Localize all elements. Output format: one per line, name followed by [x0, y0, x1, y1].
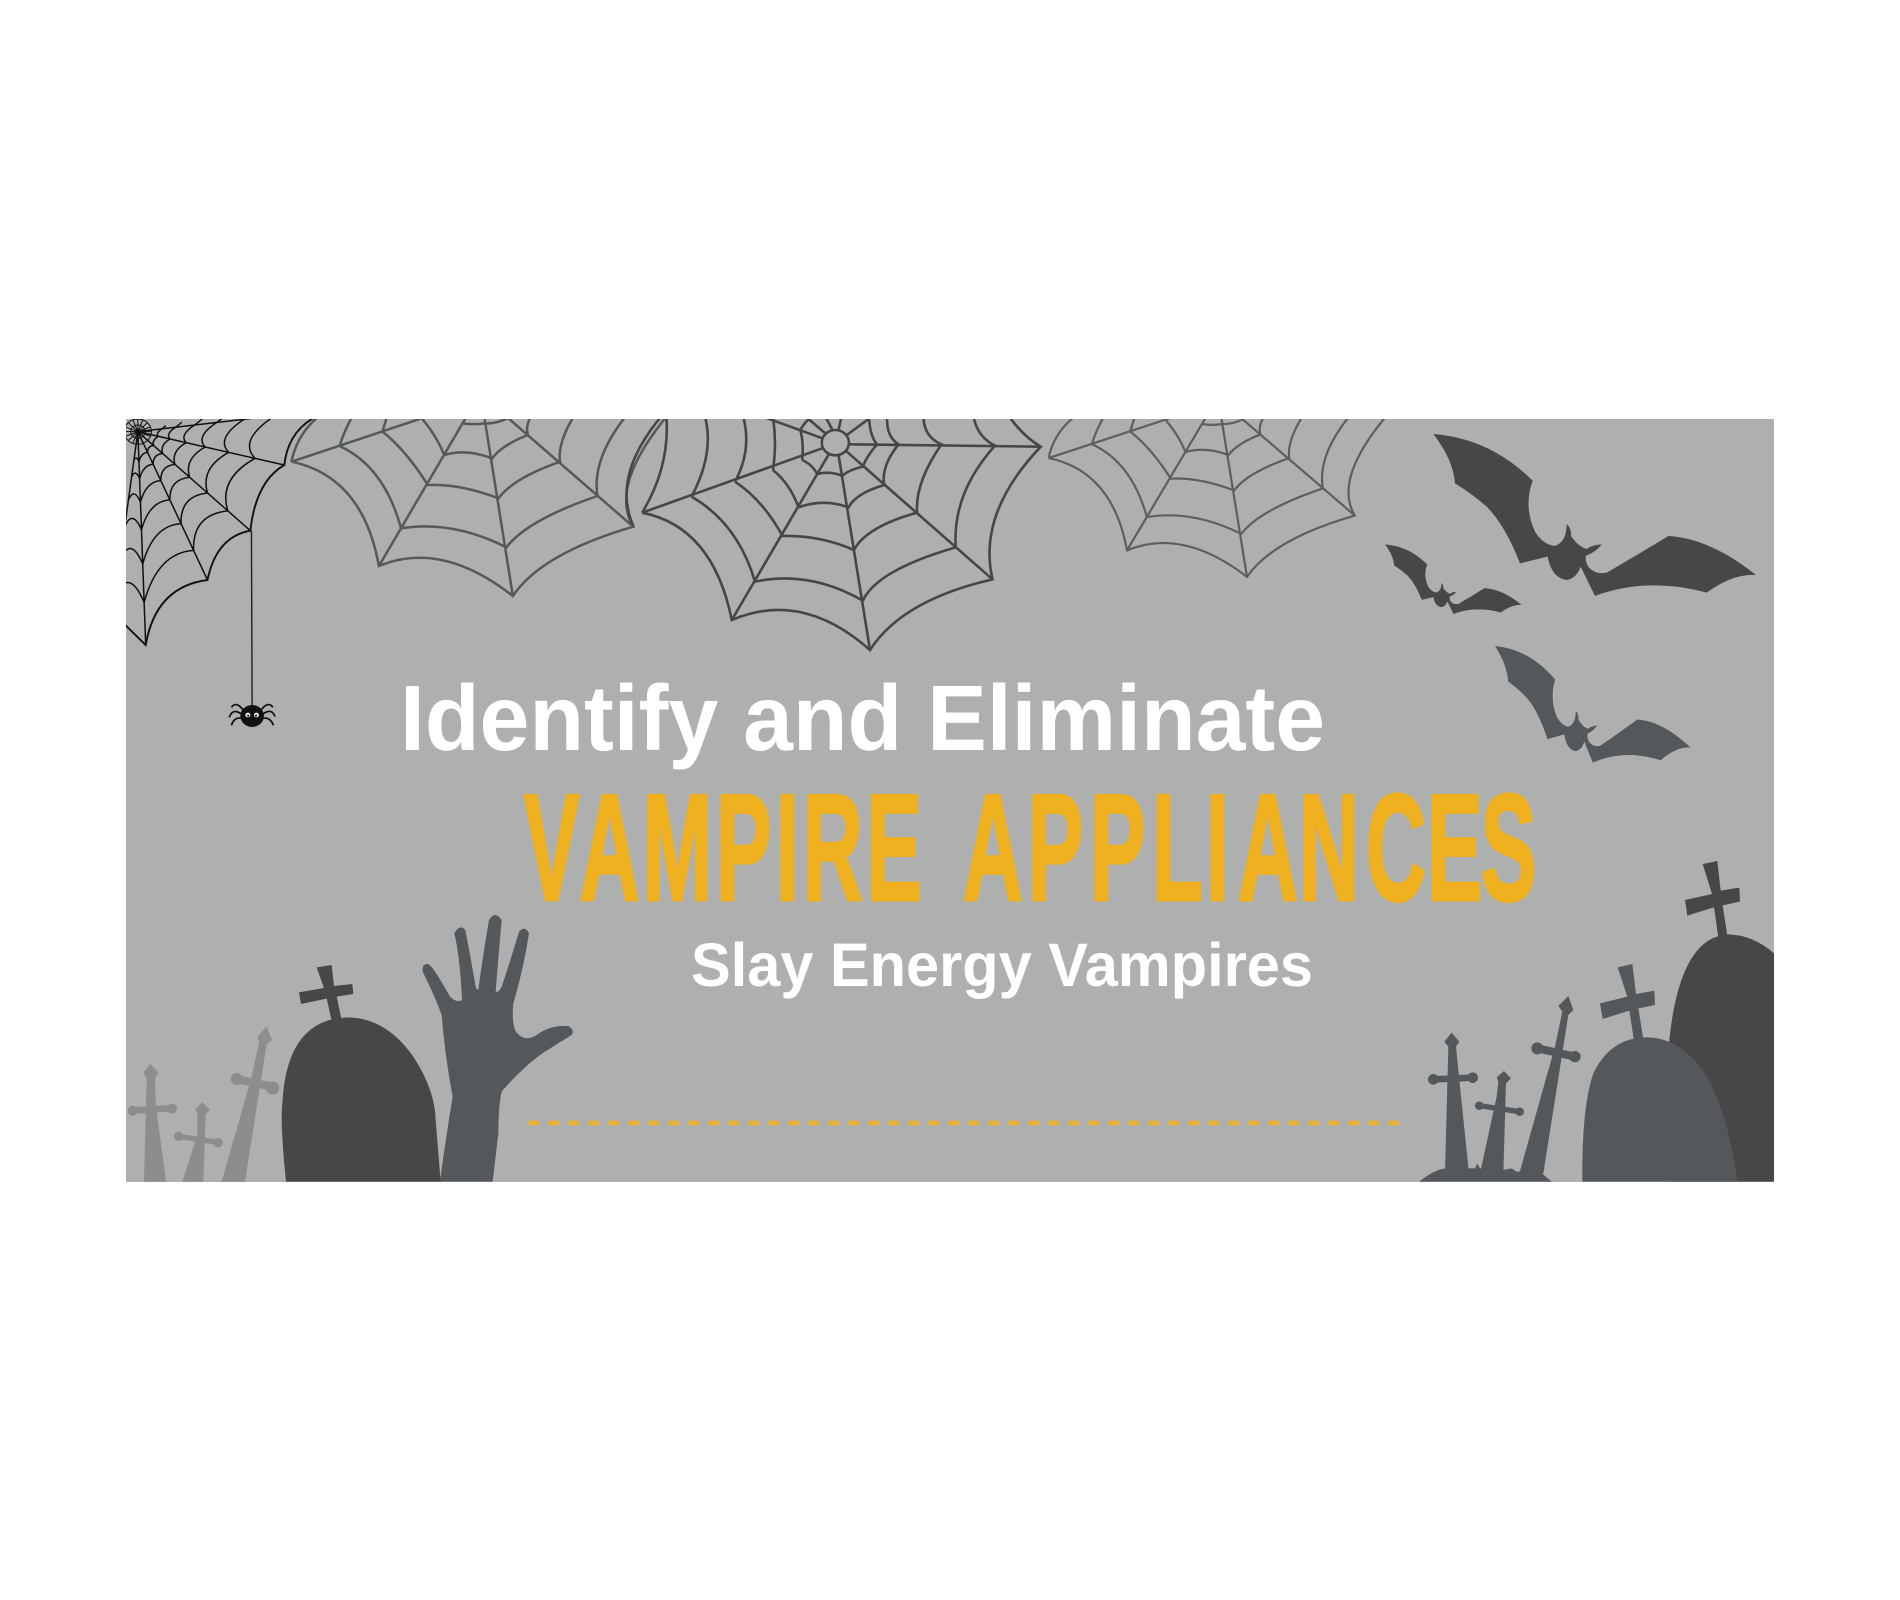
swords: right: [1419, 996, 1581, 1182]
bats group: [1385, 434, 1756, 763]
spiderweb: fourth: [1049, 417, 1385, 577]
bat: large: [1433, 434, 1756, 596]
subtitle: Slay Energy Vampires: [691, 930, 1313, 999]
spiderweb: top-left corner: [126, 419, 314, 647]
zombie hand: [423, 915, 573, 1182]
spiderweb: third with hub: [627, 417, 1041, 650]
infographic banner: [126, 419, 1774, 1182]
dashed divider: [531, 1120, 1400, 1126]
graveyard: left: [128, 915, 573, 1182]
graveyard: right: [1419, 861, 1774, 1182]
tombstone: left: [282, 965, 441, 1182]
spider hanging on thread: [229, 531, 275, 727]
panel: banner background: [126, 419, 1774, 1182]
headline: vampire appliances: VAMPIRE APPLIANCES: [524, 762, 1537, 932]
bat: small: [1385, 544, 1522, 614]
tombstone: right front: [1582, 964, 1737, 1182]
swords: left grey: [128, 1027, 279, 1182]
title line: Identify and Eliminate: [400, 666, 1325, 770]
tombstone: right back: [1669, 861, 1774, 1182]
bat: medium: [1495, 646, 1691, 763]
spiderweb: second: [291, 415, 666, 596]
